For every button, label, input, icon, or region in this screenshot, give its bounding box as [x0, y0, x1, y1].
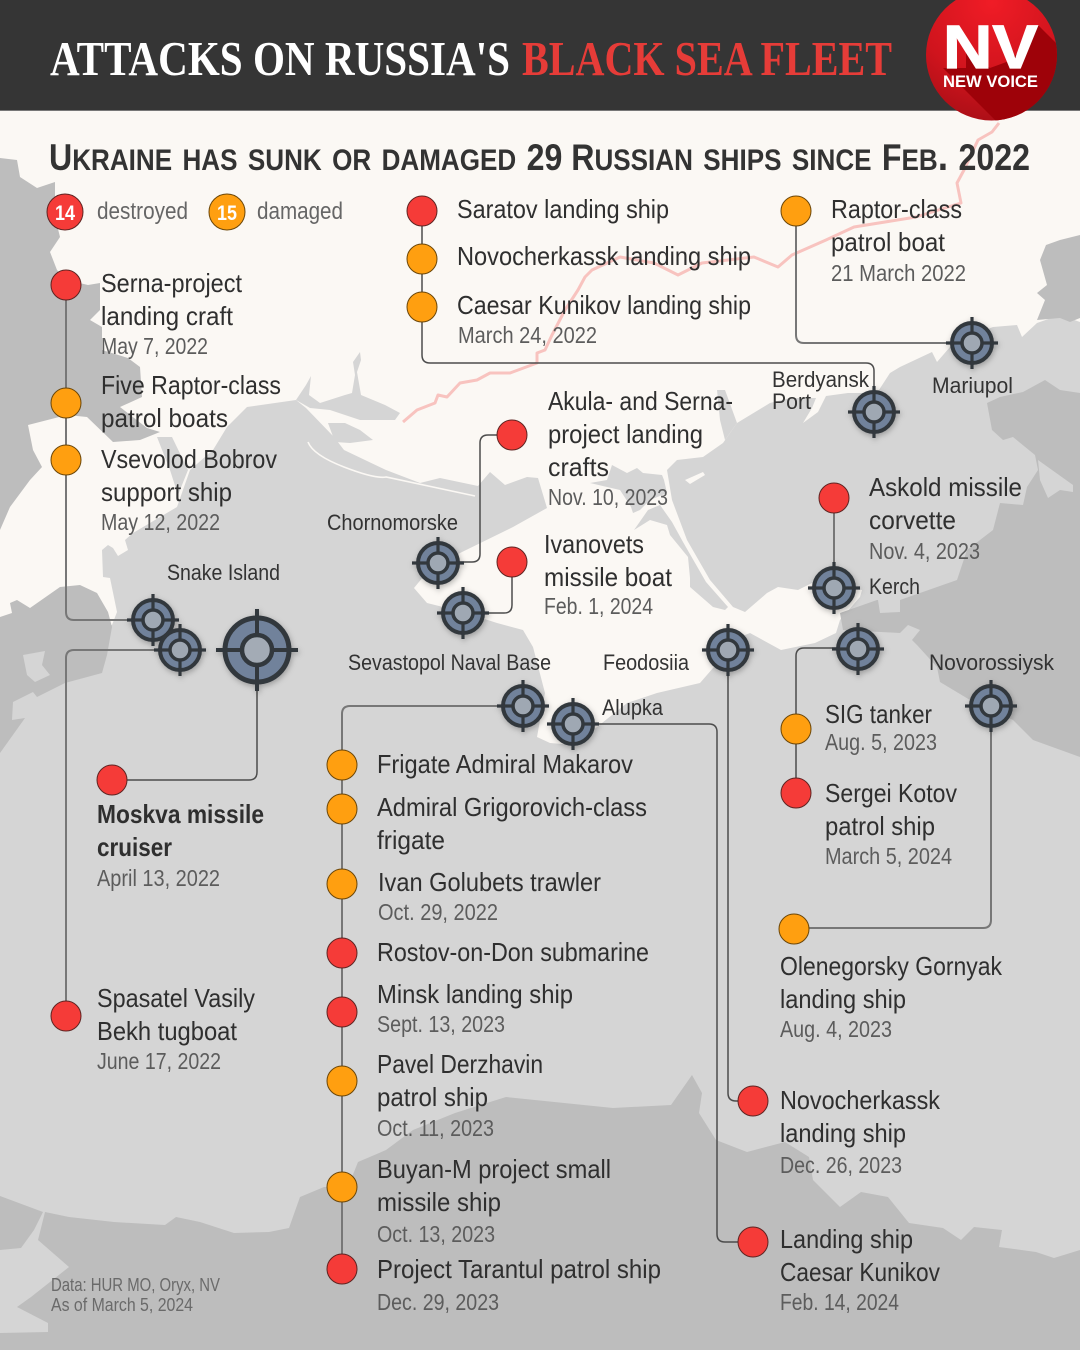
panel: Sergei Kotov: patrol ship — [825, 811, 935, 841]
panel: Spasatel Vasily Bekh — [51, 983, 255, 1074]
panel: Caesar Kunikov — [738, 1224, 940, 1315]
header bar — [0, 0, 1080, 111]
panel: SIG tanker: SIG tanker — [825, 699, 932, 729]
panel: Vsevolod Bobrov: support ship — [101, 477, 232, 507]
spits — [308, 442, 475, 496]
panel: Caesar Kunikov: Caesar Kunikov — [780, 1257, 940, 1287]
panel: Vsevolod Bobrov: Vsevolod Bobrov — [101, 444, 277, 474]
panel: Raptor-class Mariupol: patrol boat — [831, 227, 946, 257]
panel: Sevastopol ships list: Oct. 11, 2023 — [377, 1115, 494, 1141]
panel: Askold: Askold missile — [869, 472, 1022, 502]
icon: target Mariupol — [946, 317, 998, 369]
panel: Berdyansk ships: March 24, 2022 — [458, 322, 597, 348]
lagoons and estuaries — [157, 352, 737, 610]
panel: Sevastopol ships list: Pavel Derzhavin — [377, 1049, 543, 1079]
panel: Vsevolod Bobrov — [51, 444, 277, 535]
icon: target Berdyansk — [848, 386, 900, 438]
panel: Sevastopol ships list: Rostov-on-Don submarine — [377, 937, 649, 967]
icon: target Chornomorske — [412, 537, 464, 589]
panel: Sevastopol ships list: Buyan-M project small — [377, 1154, 611, 1184]
panel: Serna landing craft: May 7, 2022 — [101, 333, 208, 359]
panel: Akula and Serna: crafts — [548, 452, 609, 482]
panel: Raptor-class Mariupol: Raptor-class — [831, 194, 962, 224]
frontline border — [403, 123, 999, 422]
panel: Moskva — [97, 765, 264, 891]
panel: Sevastopol ships list: Minsk landing ship — [377, 979, 573, 1009]
panel: Raptor patrol boats: Five Raptor-class — [101, 370, 281, 400]
place labels: Port — [772, 389, 811, 414]
icon: target Alupka — [547, 698, 599, 750]
panel: Sevastopol ships list: Oct. 29, 2022 — [378, 899, 498, 925]
panel: Akula and Serna: Akula- and Serna- — [548, 386, 733, 416]
source note — [51, 1275, 220, 1315]
source note: As of March 5, 2024 — [51, 1295, 193, 1315]
panel: Berdyansk ships: Saratov landing ship — [457, 194, 669, 224]
panel: Spasatel Vasily Bekh: Bekh tugboat — [97, 1016, 238, 1046]
legend — [47, 194, 343, 230]
icon: target Feodosiia — [702, 624, 754, 676]
source note: Data: HUR MO, Oryx, NV — [51, 1275, 220, 1295]
icon: target Snake Island large — [216, 609, 298, 691]
panel: Moskva: April 13, 2022 — [97, 865, 220, 891]
icon: target Sevastopol — [497, 680, 549, 732]
panel: Ivanovets — [497, 529, 673, 619]
legend: destroyed — [97, 198, 188, 225]
panel: Askold: Nov. 4, 2023 — [869, 538, 980, 564]
place labels: Snake Island — [167, 560, 280, 585]
icon: target Kerch south — [832, 623, 884, 675]
panel: Novocherkassk: landing ship — [780, 1118, 906, 1148]
title: ATTACKS ON RUSSIA'S — [50, 31, 510, 86]
connector lines — [66, 211, 991, 1269]
logo: NV New Voice: NEW VOICE — [943, 73, 1038, 91]
place labels — [167, 367, 1055, 720]
legend: damaged — [257, 198, 343, 225]
panel: Novocherkassk — [738, 1085, 941, 1178]
panel: Akula and Serna: Nov. 10, 2023 — [548, 484, 668, 510]
panel: Raptor-class Mariupol: 21 March 2022 — [831, 260, 966, 286]
subtitle: Ukraine has sunk or damaged 29 Russian ships since Feb. 2022 — [49, 132, 1030, 180]
panel: SIG tanker — [781, 699, 937, 755]
panel: Sevastopol ships list: missile ship — [377, 1187, 501, 1217]
panel: Serna landing craft: Serna-project — [101, 268, 243, 298]
panel: Serna landing craft — [51, 268, 243, 359]
panel: Sergei Kotov: Sergei Kotov — [825, 778, 957, 808]
panel: Sergei Kotov: March 5, 2024 — [825, 843, 952, 869]
land: Moldova — [0, 158, 160, 530]
panel: Sevastopol ships list: Oct. 13, 2023 — [377, 1221, 495, 1247]
place labels: Sevastopol Naval Base — [348, 650, 551, 675]
land: Russia Krasnodar — [840, 380, 1080, 757]
icon: target Snake Island 1 — [127, 594, 179, 646]
panel: Spasatel Vasily Bekh: Spasatel Vasily — [97, 983, 255, 1013]
panel: Berdyansk ships — [407, 194, 751, 348]
panel: Askold: corvette — [869, 505, 956, 535]
panel: Raptor-class Mariupol — [781, 194, 966, 286]
panel: Moskva: cruiser — [97, 832, 172, 862]
panel: Raptor patrol boats — [51, 370, 281, 433]
panel: Caesar Kunikov: Feb. 14, 2024 — [780, 1289, 899, 1315]
panel: Berdyansk ships: Novocherkassk landing ship — [457, 241, 751, 271]
place labels: Feodosiia — [603, 650, 690, 675]
panel: Caesar Kunikov: Landing ship — [780, 1224, 913, 1254]
panel: Sevastopol ships list: Project Tarantul patrol ship — [377, 1254, 661, 1284]
panel: Olenegorsky Gornyak: Olenegorsky Gornyak — [780, 951, 1003, 981]
panel: Novocherkassk: Dec. 26, 2023 — [780, 1152, 902, 1178]
legend: 14 — [55, 202, 75, 225]
panel: Olenegorsky Gornyak: landing ship — [780, 984, 906, 1014]
title — [50, 31, 892, 86]
panel: Sevastopol ships list: Frigate Admiral Makarov — [377, 749, 633, 779]
title: BLACK SEA FLEET — [522, 31, 892, 86]
icon: target Chornomorske south — [437, 587, 489, 639]
target icons — [127, 317, 1017, 750]
logo: NV New Voice — [926, 0, 1062, 125]
panel: Akula and Serna: project landing — [548, 419, 703, 449]
panel: Sergei Kotov — [781, 778, 957, 869]
legend: 15 — [217, 202, 237, 225]
panel: SIG tanker: Aug. 5, 2023 — [825, 729, 937, 755]
panel: Spasatel Vasily Bekh: June 17, 2022 — [97, 1048, 221, 1074]
place labels: Alupka — [602, 695, 664, 720]
panel: Sevastopol ships list: Dec. 29, 2023 — [377, 1289, 499, 1315]
land: Russia north — [1037, 235, 1080, 322]
panel: Moskva: Moskva missile — [97, 799, 264, 829]
icon: target Snake Island 2 — [154, 624, 206, 676]
icon: target Kerch — [808, 562, 860, 614]
panel: Raptor patrol boats: patrol boats — [101, 403, 228, 433]
panel: Ivanovets: Feb. 1, 2024 — [544, 593, 653, 619]
panel: Novocherkassk: Novocherkassk — [780, 1085, 941, 1115]
logo: NV New Voice: NV — [943, 13, 1038, 81]
place labels: Kerch — [869, 574, 920, 599]
place labels: Mariupol — [932, 373, 1013, 398]
panel: Sevastopol ships list: Ivan Golubets trawler — [378, 867, 601, 897]
land: Ukraine and Crimea — [0, 110, 1080, 745]
panel: Sevastopol ships list: patrol ship — [377, 1082, 488, 1112]
place labels: Novorossiysk — [929, 650, 1055, 675]
panel: Ivanovets: Ivanovets — [544, 529, 644, 559]
land: Romania — [0, 585, 112, 753]
icon: target Novorossiysk — [965, 680, 1017, 732]
panel: Sevastopol ships list: Admiral Grigorovich-class — [377, 792, 647, 822]
panel: Sevastopol ships list: Sept. 13, 2023 — [377, 1011, 505, 1037]
place labels: Chornomorske — [327, 510, 458, 535]
panel: Sevastopol ships list — [327, 749, 661, 1315]
panel: Olenegorsky Gornyak: Aug. 4, 2023 — [780, 1016, 892, 1042]
panel: Ivanovets: missile boat — [544, 562, 673, 592]
panel: Askold — [819, 472, 1022, 564]
panel: Sevastopol ships list: frigate — [377, 825, 445, 855]
panel: Akula and Serna — [497, 386, 733, 510]
place labels: Berdyansk — [772, 367, 870, 392]
panel: Berdyansk ships: Caesar Kunikov landing ship — [457, 290, 751, 320]
panel: Olenegorsky Gornyak — [779, 914, 1003, 1042]
panel: Serna landing craft: landing craft — [101, 301, 234, 331]
land: Turkey — [0, 1075, 1080, 1350]
panel: Vsevolod Bobrov: May 12, 2022 — [101, 509, 220, 535]
